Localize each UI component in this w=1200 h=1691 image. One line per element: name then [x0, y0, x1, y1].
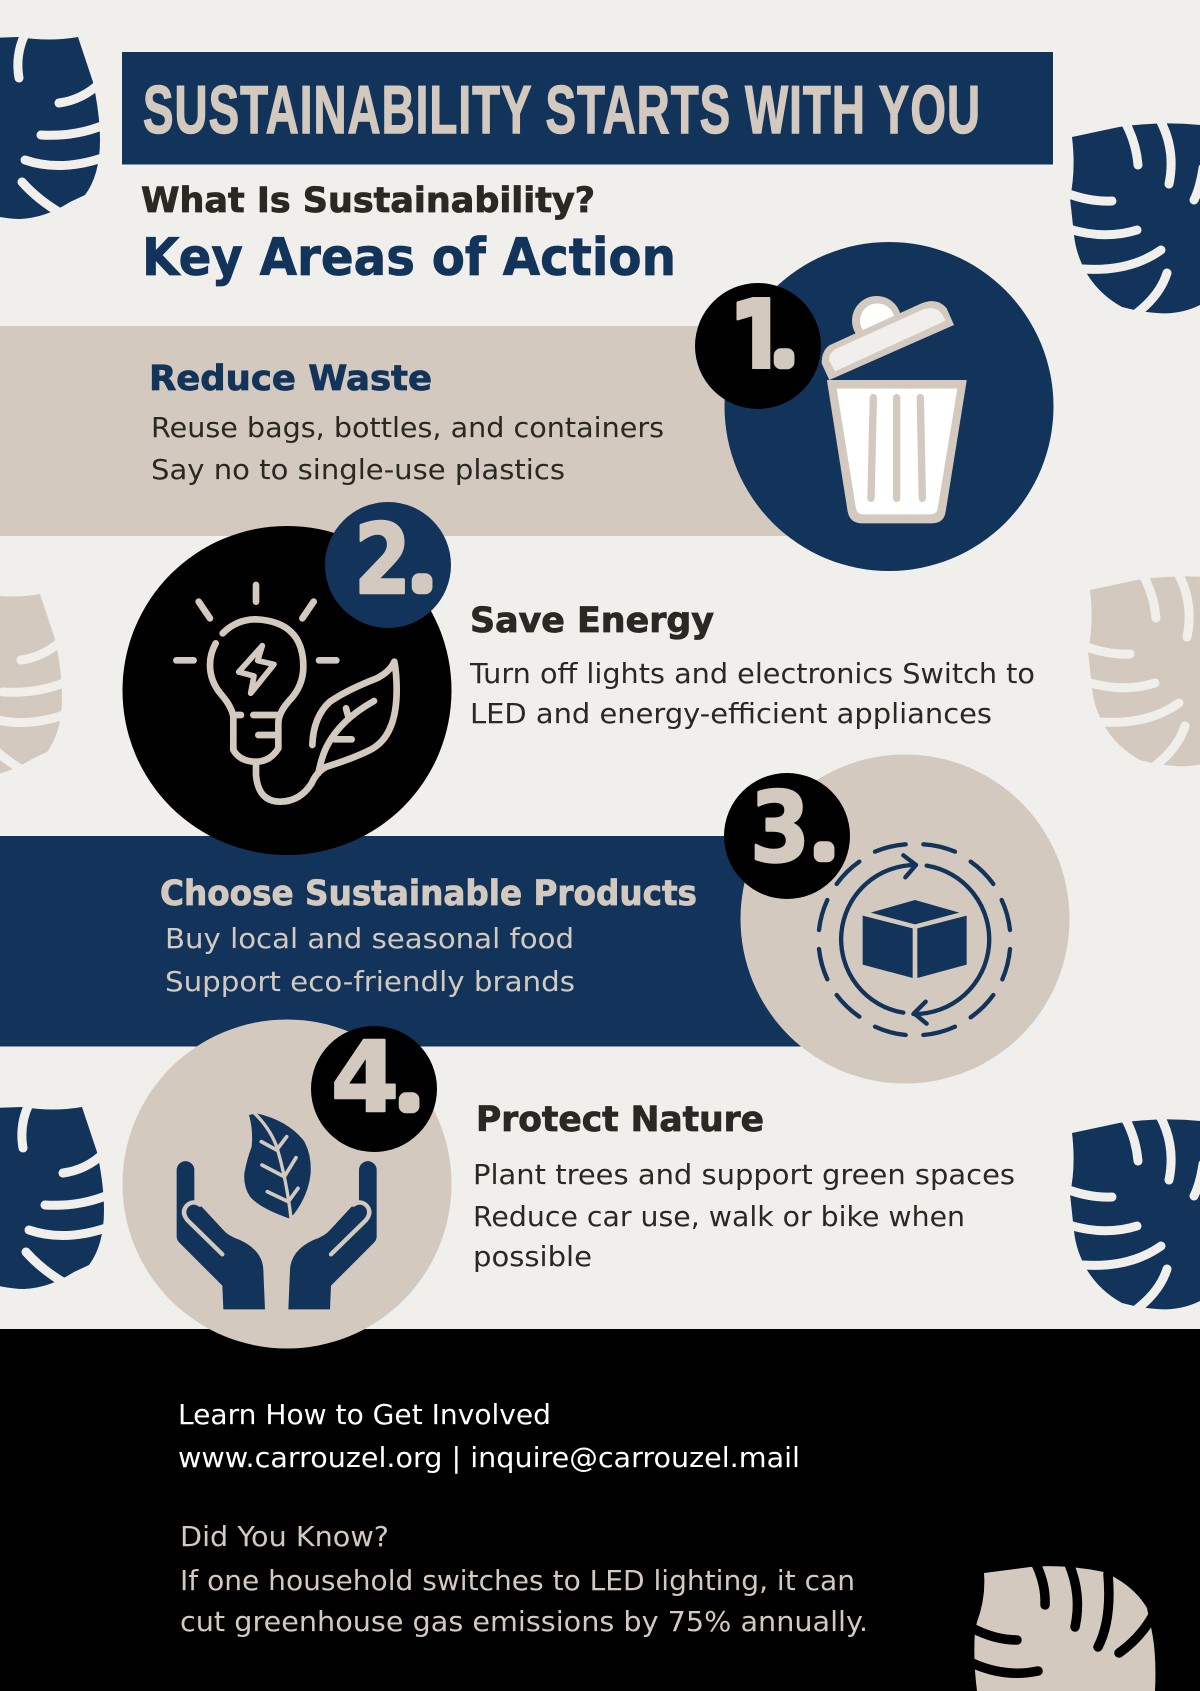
circle — [122, 526, 452, 855]
heading: Protect Nature — [476, 1100, 764, 1140]
body line 1: Buy local and seasonal food — [165, 922, 574, 955]
circle — [122, 1020, 452, 1348]
did you know heading: Did You Know? — [180, 1520, 389, 1553]
badge 1 — [695, 283, 821, 409]
panel: choose sustainable products band — [0, 836, 820, 1046]
body line 2: LED and energy-efficient appliances — [470, 697, 992, 730]
subheading: What Is Sustainability? — [141, 181, 595, 221]
body line 2: Support eco-friendly brands — [165, 965, 575, 998]
fact line 1: If one household switches to LED lighting, it can — [180, 1564, 855, 1597]
icon: monstera leaf middle right — [1084, 573, 1200, 766]
badge 4: . — [403, 1067, 415, 1116]
band — [0, 326, 800, 536]
heading: Choose Sustainable Products — [160, 874, 697, 914]
badge 2: . — [416, 548, 428, 597]
badge 2: 2 — [354, 503, 411, 616]
title banner — [122, 52, 1053, 164]
icon: monstera leaf top right — [1066, 120, 1200, 313]
body line 2: Reduce car use, walk or bike when — [473, 1200, 965, 1233]
body line 1: Plant trees and support green spaces — [473, 1158, 1015, 1191]
badge 3: . — [818, 816, 830, 865]
badge 3: 3 — [750, 771, 810, 884]
icon: trash can — [822, 296, 966, 523]
icon: monstera leaf footer — [972, 1564, 1155, 1691]
heading: key areas of action: Key Areas of Action — [142, 228, 676, 288]
badge 4: 4 — [331, 1021, 399, 1134]
body line 3: possible — [473, 1240, 592, 1273]
circle — [740, 754, 1070, 1084]
body line 2: Say no to single-use plastics — [151, 453, 565, 486]
badge 3 — [724, 771, 850, 899]
body line 1: Turn off lights and electronics Switch to — [469, 657, 1035, 690]
badge 1: 1 — [727, 274, 791, 423]
body line 1: Reuse bags, bottles, and containers — [151, 411, 664, 444]
badge 4 — [311, 1021, 437, 1152]
icon: monstera leaf lower left — [0, 1104, 108, 1289]
icon: recycle box — [819, 844, 1010, 1035]
panel: choose sustainable products — [160, 754, 1070, 1084]
fact line 2: cut greenhouse gas emissions by 75% annually. — [180, 1605, 868, 1638]
icon: light bulb and leaf — [176, 585, 397, 802]
heading: Save Energy — [470, 601, 714, 641]
icon: monstera leaf middle left — [0, 591, 66, 776]
icon: hands holding leaf — [177, 1113, 377, 1309]
circle — [724, 242, 1054, 571]
contact line 2: www.carrouzel.org | inquire@carrouzel.mail — [178, 1441, 800, 1474]
heading: Reduce Waste — [149, 359, 432, 399]
panel: footer — [0, 1329, 1200, 1691]
contact line 1: Learn How to Get Involved — [178, 1398, 551, 1431]
panel: save energy — [122, 502, 1035, 855]
badge 1: . — [778, 323, 790, 372]
panel: protect nature — [122, 1020, 1015, 1348]
icon: monstera leaf top left — [0, 34, 104, 219]
badge 2 — [325, 502, 451, 628]
panel: reduce waste — [0, 242, 1054, 571]
footer background — [0, 1329, 1200, 1691]
icon: monstera leaf lower right — [1066, 1116, 1200, 1309]
